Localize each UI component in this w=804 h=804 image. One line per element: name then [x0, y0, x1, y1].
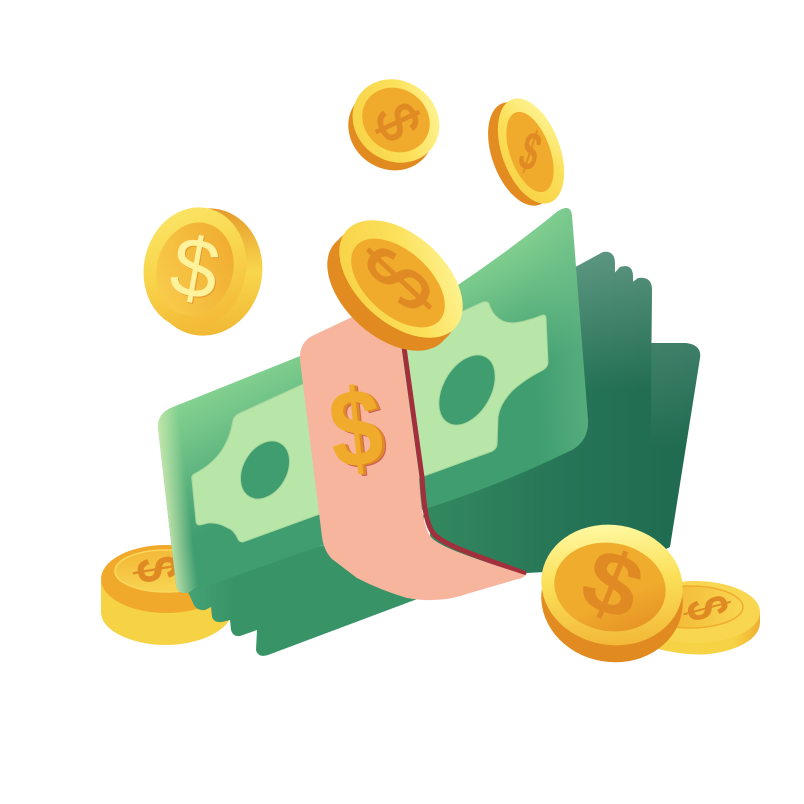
- back note: second: [430, 266, 633, 570]
- coin: top right: $: [512, 119, 548, 183]
- dollar on band: $: [327, 365, 391, 493]
- dollar on band: $: [328, 366, 392, 494]
- coin: top middle: $: [361, 93, 434, 150]
- coin: upper left: $: [164, 218, 226, 318]
- stack body under front note: [425, 470, 590, 573]
- back note: far right: [480, 343, 700, 570]
- coin: large center top: $: [343, 225, 454, 332]
- banknote stack: [158, 208, 700, 656]
- coin: upper left: [132, 198, 274, 346]
- coin: lower right lying flat: $: [672, 590, 742, 626]
- dollar on band: $: [324, 364, 388, 492]
- coin: large lower right: $: [569, 527, 657, 640]
- note centre panel: [192, 302, 548, 542]
- back note: first: [430, 252, 615, 560]
- oval right: [427, 345, 507, 435]
- coin: lower right lying flat: [630, 581, 760, 654]
- paper band: [300, 317, 525, 600]
- stacked note edges lower left: [188, 515, 424, 656]
- front note: [158, 208, 588, 593]
- coin: large lower right: [531, 514, 693, 673]
- coin: lower left lying flat: [101, 545, 232, 645]
- coin: upper left: $: [165, 219, 227, 319]
- coin: top right: [475, 89, 577, 215]
- coin: lower left lying flat: $: [122, 551, 191, 587]
- coin: top middle: [332, 62, 456, 187]
- oval left: [230, 432, 300, 508]
- coin: large center top: [305, 197, 485, 374]
- back note: third: [430, 278, 652, 580]
